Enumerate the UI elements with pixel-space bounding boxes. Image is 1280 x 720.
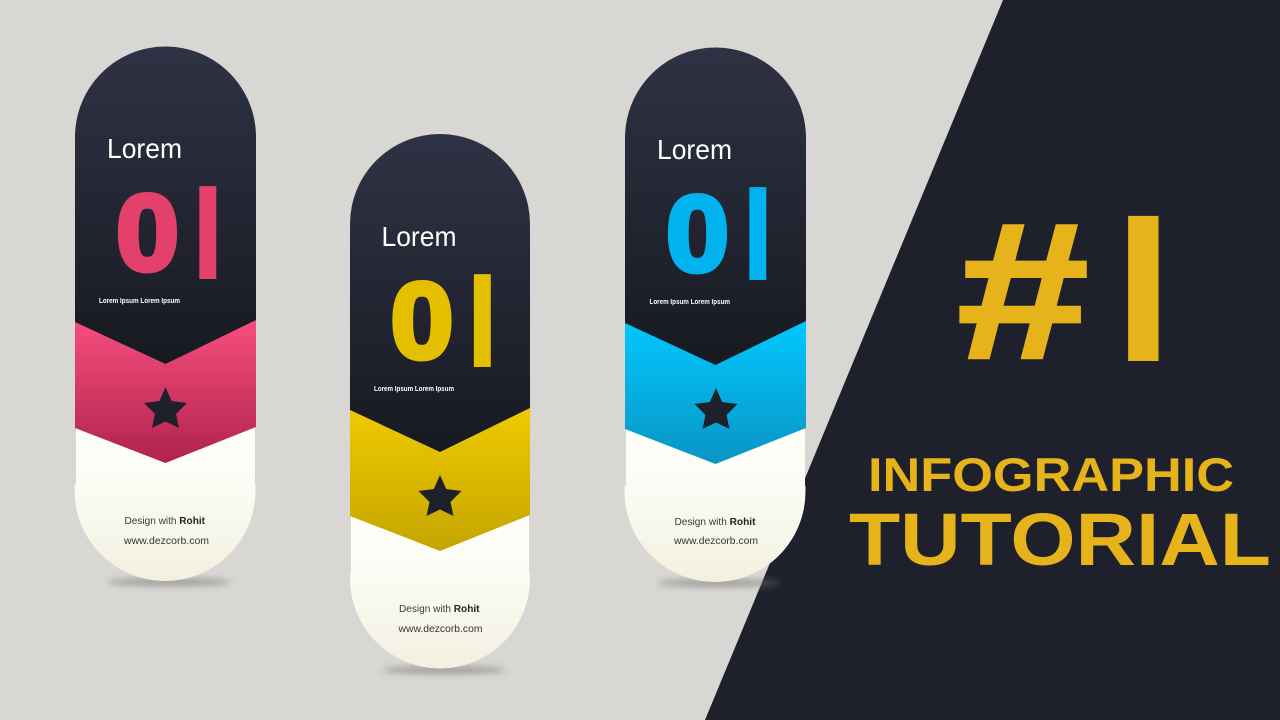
title number: I bbox=[1114, 170, 1173, 406]
card 2 caption: Lorem Ipsum Lorem Ipsum bbox=[374, 386, 454, 393]
card 3: blue bbox=[624, 48, 806, 587]
card 1: pink bbox=[74, 47, 256, 586]
card 3 heading: Lorem bbox=[657, 134, 732, 165]
title number: # bbox=[958, 183, 1088, 399]
card 3 dark top bbox=[625, 48, 806, 371]
title number bbox=[958, 170, 1173, 406]
card 1 url: www.dezcorb.com bbox=[123, 535, 209, 547]
icon: star 3 bbox=[694, 388, 738, 429]
subtitle: infographic: INFOGRAPHIC bbox=[868, 448, 1234, 501]
card 2 dark top bbox=[350, 134, 530, 458]
card 3 caption: Lorem Ipsum Lorem Ipsum bbox=[650, 299, 730, 306]
card 2 number: I bbox=[466, 244, 499, 396]
card 2 number: 0 bbox=[390, 261, 454, 381]
card 3 shadow bbox=[657, 580, 781, 586]
card 1 shadow bbox=[107, 578, 231, 586]
card 2 number bbox=[390, 244, 499, 396]
card 3 credit: Design with Rohit bbox=[674, 517, 756, 528]
card 1 cream base bbox=[74, 420, 256, 581]
card 2 url: www.dezcorb.com bbox=[398, 623, 483, 635]
card 1 credit: Design with Rohit bbox=[124, 516, 206, 527]
icon: star 2 bbox=[418, 475, 462, 516]
card 1 number bbox=[116, 156, 224, 308]
card 1 heading: Lorem bbox=[107, 133, 182, 164]
background dark diagonal panel bbox=[705, 0, 1280, 720]
card 1 number: I bbox=[192, 156, 224, 308]
subtitle: tutorial: TUTORIAL bbox=[849, 498, 1271, 581]
card 2: yellow bbox=[350, 134, 530, 674]
card 3 url: www.dezcorb.com bbox=[673, 535, 758, 547]
card 1 number: 0 bbox=[116, 173, 179, 293]
card 3 cream base bbox=[624, 421, 806, 582]
card 3 number: 0 bbox=[666, 174, 729, 294]
card 2 shadow bbox=[382, 666, 506, 674]
card 2 cream base bbox=[350, 508, 530, 668]
card 2 heading: Lorem bbox=[382, 221, 456, 252]
card 2 colour chevron bbox=[350, 408, 530, 551]
card 2 credit: Design with Rohit bbox=[399, 604, 480, 615]
card 3 number: I bbox=[742, 157, 774, 309]
card 3 colour chevron bbox=[625, 321, 806, 464]
card 1 dark top bbox=[75, 47, 256, 370]
icon: star 1 bbox=[144, 387, 187, 428]
card 1 colour chevron bbox=[75, 320, 256, 463]
card 3 number bbox=[666, 157, 774, 309]
card 1 caption: Lorem Ipsum Lorem Ipsum bbox=[99, 298, 180, 305]
